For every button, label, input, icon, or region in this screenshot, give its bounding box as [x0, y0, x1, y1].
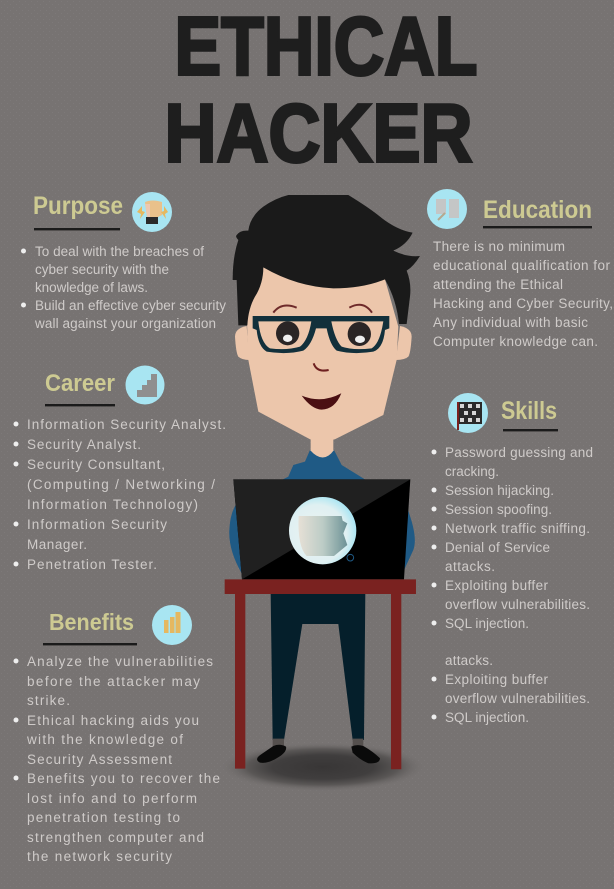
skills text: SQL injection.: [445, 616, 529, 631]
icon: thumbs up chart: [152, 605, 192, 645]
career text: (Computing / Networking /: [27, 477, 215, 492]
laptop: [233, 479, 410, 579]
shoes: [257, 745, 286, 763]
mouth: [302, 393, 341, 410]
education text: Any individual with basic: [433, 315, 588, 330]
benefits text: Ethical hacking aids you: [27, 713, 199, 728]
benefits text: strengthen computer and: [27, 830, 204, 845]
benefits text: the network security: [27, 849, 172, 864]
skills text: SQL injection.: [445, 710, 529, 725]
education text: There is no minimum: [433, 239, 565, 254]
skills text: overflow vulnerabilities.: [445, 691, 590, 706]
icon: stairs: [126, 366, 164, 404]
panel: purpose: [21, 192, 226, 331]
education text: Computer knowledge can.: [433, 334, 598, 349]
skills text: Denial of Service: [445, 540, 550, 555]
career text: Information Security: [27, 517, 167, 532]
career text: Penetration Tester.: [27, 557, 157, 572]
benefits text: with the knowledge of: [26, 732, 183, 747]
desk shadow: [222, 743, 424, 791]
head: [233, 195, 420, 457]
heading: skills: Skills: [501, 397, 557, 425]
skills text: attacks.: [445, 653, 493, 668]
benefits text: lost info and to perform: [27, 791, 197, 806]
benefits text: Analyze the vulnerabilities: [27, 654, 213, 669]
purpose text: [21, 244, 226, 331]
education text: attending the Ethical: [433, 277, 563, 292]
career text: [14, 417, 226, 572]
skills text: Exploiting buffer: [445, 578, 548, 593]
benefits text: [14, 654, 220, 864]
laptop logo: [289, 497, 356, 564]
skills text: cracking.: [445, 464, 499, 479]
icon: checkered flag: [448, 393, 488, 433]
career text: Manager.: [27, 537, 87, 552]
skills text: attacks.: [445, 559, 495, 574]
character illustration: [222, 195, 424, 791]
icon: fist with lightning: [132, 192, 172, 232]
purpose text: knowledge of laws.: [35, 280, 148, 295]
hair: [233, 195, 420, 325]
panel: education: [427, 189, 613, 349]
purpose text: wall against your organization: [34, 316, 216, 331]
legs: [271, 593, 365, 740]
purpose text: To deal with the breaches of: [35, 244, 204, 259]
skills text: overflow vulnerabilities.: [445, 597, 590, 612]
title: HACKER: [164, 86, 472, 180]
benefits text: strike.: [27, 693, 70, 708]
benefits text: Benefits you to recover the: [27, 771, 220, 786]
desk: [225, 579, 416, 594]
panel: skills: [432, 393, 593, 725]
benefits text: Security Assessment: [27, 752, 172, 767]
panel: benefits: [14, 605, 220, 864]
heading: purpose: Purpose: [33, 192, 123, 220]
heading: career: Career: [45, 370, 115, 397]
purpose text: Build an effective cyber security: [35, 298, 226, 313]
eyebrows: [273, 306, 297, 313]
title: ETHICAL: [174, 0, 478, 92]
benefits text: before the attacker may: [27, 674, 200, 689]
skills text: Password guessing and: [445, 445, 593, 460]
skills text: [432, 445, 593, 725]
career text: Information Technology): [27, 497, 198, 512]
panel: career: [14, 366, 226, 572]
shirt: [229, 450, 415, 573]
education text: educational qualification for: [433, 258, 610, 273]
career text: Security Analyst.: [27, 437, 141, 452]
glasses: [253, 316, 389, 353]
title: [164, 0, 478, 180]
career text: Information Security Analyst.: [27, 417, 226, 432]
nose: [314, 363, 329, 371]
body: [225, 450, 416, 769]
education text: Hacking and Cyber Security,: [433, 296, 613, 311]
icon: books: [427, 189, 467, 229]
purpose text: cyber security with the: [35, 262, 169, 277]
skills text: Session hijacking.: [445, 483, 554, 498]
eyes: [276, 321, 299, 345]
education text: [433, 239, 613, 349]
skills text: Exploiting buffer: [445, 672, 548, 687]
heading: education: Education: [483, 196, 592, 224]
heading: benefits: Benefits: [49, 609, 134, 635]
skills text: Network traffic sniffing.: [445, 521, 590, 536]
benefits text: penetration testing to: [27, 810, 180, 825]
skills text: Session spoofing.: [445, 502, 552, 517]
career text: Security Consultant,: [27, 457, 165, 472]
